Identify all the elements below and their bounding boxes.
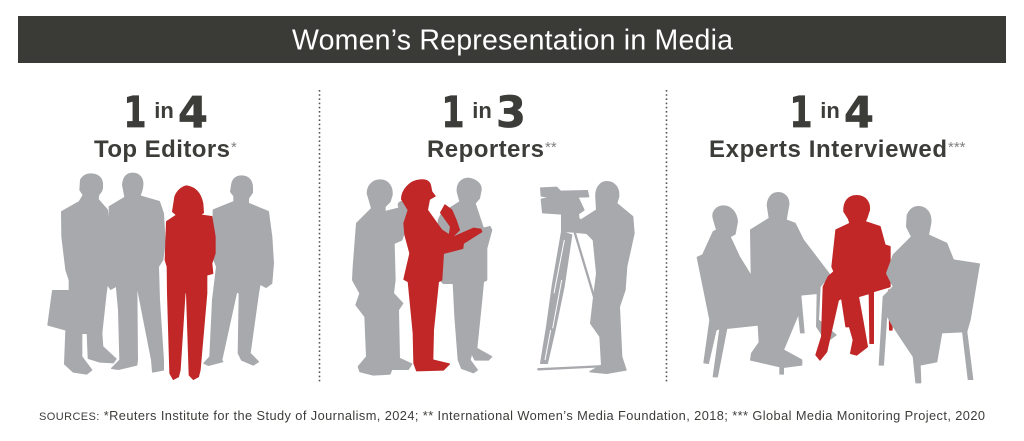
statistic: 1 in 4 experts interviewed: 1	[790, 88, 812, 138]
footnote mark: *	[231, 139, 237, 156]
camera and tripod	[538, 187, 607, 369]
statistic: 1 in 3 reporters: 1	[442, 88, 464, 138]
statistic: 1 in 3 reporters: 3	[496, 88, 526, 138]
statistic: 1 in 4 top editors: 1	[124, 88, 146, 138]
panel: experts interviewed	[697, 88, 979, 383]
statistic: 1 in 4 top editors: 4	[178, 88, 208, 138]
statistic: 1 in 3 reporters	[442, 88, 526, 138]
statistic: 1 in 4 experts interviewed: 4	[844, 88, 874, 138]
illustration: three men and one woman standing	[48, 173, 273, 379]
statistic: 1 in 4 experts interviewed	[790, 88, 874, 138]
footnote marks: ***	[948, 139, 966, 156]
title banner	[18, 16, 1006, 63]
heading: experts interviewed: Experts Interviewed	[709, 136, 947, 163]
statistic: 1 in 3 reporters: in	[472, 98, 492, 123]
panel: reporters	[353, 88, 634, 375]
statistic: 1 in 4 top editors	[124, 88, 208, 138]
statistic: 1 in 4 top editors: in	[154, 98, 174, 123]
illustration: seated interview group	[697, 193, 979, 383]
heading: top editors: Top Editors	[94, 136, 230, 163]
statistic: 1 in 4 experts interviewed: in	[820, 98, 840, 123]
heading: reporters: Reporters	[427, 136, 544, 163]
sources footnote: SOURCES: *Reuters Institute for the Study of Journalism, 2024; ** International Women’s Media Foundation, 2018; *** Global Media Monitoring Project, 2020	[39, 408, 985, 423]
panel: top editors	[48, 88, 273, 379]
illustration: reporters and camera operator	[353, 178, 634, 375]
divider left	[318, 90, 320, 382]
footnote marks: **	[545, 139, 557, 156]
title banner: Women’s Representation in Media	[292, 24, 733, 56]
divider right	[666, 90, 668, 382]
